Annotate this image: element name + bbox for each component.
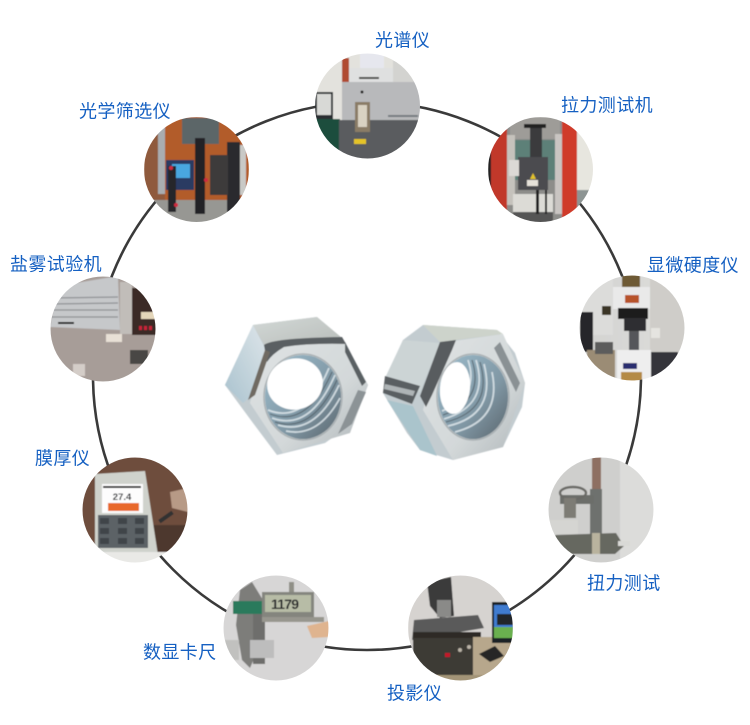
label: 显微硬度仪: 显微硬度仪 bbox=[647, 256, 739, 276]
photo: torque tester bbox=[548, 457, 654, 563]
left hex nut bbox=[225, 317, 368, 455]
label: 拉力测试机: 拉力测试机 bbox=[561, 96, 653, 116]
label: 光学筛选仪: 光学筛选仪 bbox=[79, 102, 171, 122]
label: 扭力测试: 扭力测试 bbox=[587, 574, 661, 594]
connecting ring bbox=[93, 102, 641, 650]
photo: optical sorter bbox=[144, 117, 249, 224]
label: 数显卡尺: 数显卡尺 bbox=[143, 642, 217, 662]
label: 投影仪: 投影仪 bbox=[387, 684, 442, 704]
photo: coating thickness gauge bbox=[82, 457, 188, 565]
photo: salt spray tester bbox=[50, 276, 158, 382]
label: 盐雾试验机: 盐雾试验机 bbox=[10, 254, 102, 274]
label: 光谱仪: 光谱仪 bbox=[375, 30, 430, 50]
photo: profile projector bbox=[408, 575, 515, 682]
caliper reading: 1179 bbox=[271, 596, 299, 612]
photo: micro hardness tester bbox=[579, 275, 686, 381]
photo: digital caliper bbox=[223, 575, 329, 682]
right hex nut bbox=[383, 325, 525, 460]
gauge reading: 27.4 bbox=[113, 492, 132, 503]
photo: tensile tester bbox=[488, 117, 594, 223]
central photo: two hex nuts bbox=[225, 317, 525, 460]
label: 膜厚仪: 膜厚仪 bbox=[35, 448, 90, 468]
photo: spectrometer bbox=[315, 53, 423, 161]
